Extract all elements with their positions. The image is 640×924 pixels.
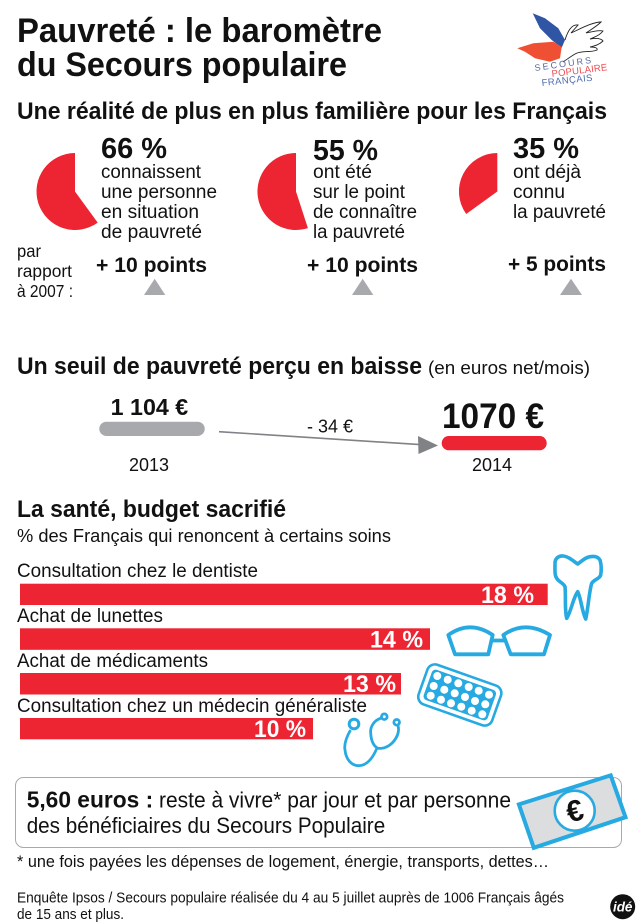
threshold chart: 2013 to 2014 — [99, 394, 547, 475]
value 2013 — [99, 394, 205, 475]
bar: médecin généraliste 10 % — [17, 696, 367, 743]
icon: tooth — [555, 556, 601, 619]
bar: médicaments 13 %: Achat de médicaments — [17, 651, 208, 672]
bar: médecin généraliste 10 %: 10 % — [254, 716, 306, 743]
bar: dentiste 18 %: Consultation chez le dentiste — [17, 561, 258, 582]
stat text: 35 %: ont déjà — [513, 162, 581, 183]
stat text: 55 %: la pauvreté — [313, 222, 405, 243]
value 2013: 2013 — [129, 455, 169, 475]
stat text: 35 %: 35 % — [513, 133, 579, 165]
source: Enquête Ipsos / Secours populaire réalisée du 4 au 5 juillet auprès de 1006 Français âgés — [17, 891, 564, 907]
stat panel: 55 % — [257, 135, 418, 295]
source — [17, 891, 564, 923]
value 2014: 1070 € — [442, 397, 544, 436]
bar: médicaments 13 %: 13 % — [343, 671, 396, 698]
icon: banknote: € — [563, 793, 587, 830]
section heading: santé — [17, 496, 391, 546]
source: de 15 ans et plus. — [17, 907, 124, 923]
bar: lunettes 14 %: 14 % — [370, 626, 423, 654]
bar: lunettes 14 % — [17, 606, 430, 654]
section heading: seuil de pauvreté: (en euros net/mois) — [428, 358, 590, 378]
pie: 66 % — [37, 153, 98, 230]
stat text: 55 % — [313, 135, 417, 243]
stat text: 35 %: connu — [513, 182, 565, 203]
section heading: réalité familière: Une réalité de plus en plus familière pour les Français — [17, 98, 607, 125]
icon: stethoscope — [345, 714, 400, 766]
bar: médicaments 13 % — [17, 651, 401, 698]
change: + 10 points: + 10 points — [307, 254, 418, 277]
stat text: 66 %: de pauvreté — [101, 222, 202, 243]
arrow: minus 34 euros: - 34 € — [307, 416, 353, 436]
section heading: seuil de pauvreté: Un seuil de pauvreté perçu en baisse — [17, 353, 422, 380]
stat text: 55 %: 55 % — [313, 135, 378, 167]
bar: dentiste 18 % — [17, 561, 548, 609]
comparison note: par rapport à 2007: rapport — [17, 261, 72, 281]
stat text: 66 %: connaissent — [101, 162, 202, 183]
title: Pauvreté : le baromètre — [17, 12, 382, 50]
stat text: 55 %: de connaître — [313, 202, 417, 223]
stat text: 55 %: sur le point — [313, 182, 406, 203]
icon: banknote — [519, 775, 626, 848]
callout: reste à vivre: 5,60 euros : — [27, 786, 153, 812]
icon: blister of pills — [416, 662, 504, 728]
icon: up triangle — [352, 279, 373, 295]
bar: lunettes 14 %: Achat de lunettes — [17, 606, 163, 627]
title — [17, 12, 382, 84]
logo: Secours populaire français: POPULAIRE — [551, 62, 608, 80]
comparison note: par rapport à 2007: par — [17, 241, 41, 261]
icon: glasses — [448, 627, 550, 654]
stat text: 66 %: une personne — [101, 182, 217, 203]
stat text: 66 % — [101, 133, 217, 243]
stat panel: 66 % — [37, 133, 217, 295]
icon: up triangle — [560, 279, 582, 295]
value 2013: 1 104 € — [111, 394, 188, 420]
logo: Secours populaire français: SECOURS — [534, 55, 592, 73]
stat text: 35 %: la pauvreté — [513, 202, 606, 223]
comparison note: par rapport à 2007: à 2007 : — [17, 281, 73, 301]
callout: reste à vivre: des bénéficiaires du Secours Populaire — [27, 813, 385, 838]
footnote: * une fois payées les dépenses de logement, énergie, transports, dettes… — [17, 852, 549, 871]
arrow: minus 34 euros — [219, 416, 438, 454]
stat text: 66 %: 66 % — [101, 133, 167, 165]
logo: Secours populaire français — [517, 13, 608, 89]
change: + 10 points: + 10 points — [96, 254, 207, 277]
stat panel: 35 % — [459, 133, 606, 295]
stat text: 35 % — [513, 133, 606, 223]
bar: dentiste 18 %: 18 % — [481, 582, 534, 609]
logo: idé — [610, 894, 635, 919]
logo: Secours populaire français: FRANÇAIS — [541, 73, 593, 89]
pie: 55 % — [257, 153, 308, 230]
logo: idé: idé — [613, 900, 633, 914]
title: du Secours populaire — [17, 46, 347, 84]
callout: reste à vivre — [16, 778, 622, 848]
bar: médecin généraliste 10 %: Consultation chez un médecin généraliste — [17, 696, 367, 717]
value 2014: 2014 — [472, 455, 512, 475]
comparison note: par rapport à 2007 — [17, 241, 73, 301]
stat text: 66 %: en situation — [101, 202, 199, 223]
value 2014 — [442, 397, 547, 475]
change: + 5 points: + 5 points — [508, 253, 606, 276]
stat text: 55 %: ont été — [313, 162, 372, 183]
icon: up triangle — [144, 279, 165, 295]
callout: reste à vivre: reste à vivre* par jour et par personne — [159, 787, 511, 812]
section heading: santé: La santé, budget sacrifié — [17, 496, 286, 523]
section heading: santé: % des Français qui renoncent à certains soins — [17, 525, 391, 546]
pie: 35 % — [459, 153, 497, 214]
bar chart: renoncement aux soins — [17, 561, 548, 743]
